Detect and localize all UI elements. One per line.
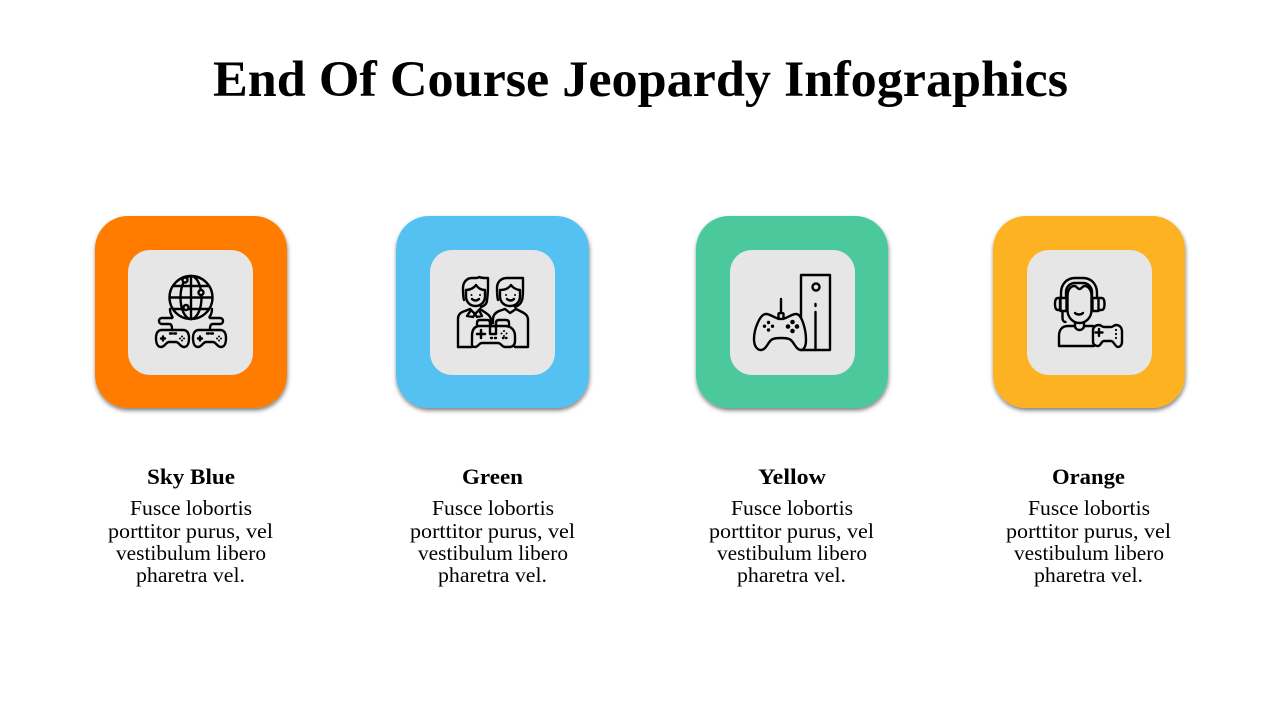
card background green bbox=[696, 216, 888, 408]
title: End Of Course Jeopardy Infographics bbox=[213, 52, 1068, 108]
body text: Fusce lobortis bbox=[432, 496, 554, 520]
body text: vestibulum libero bbox=[418, 541, 568, 565]
heading: Sky Blue bbox=[147, 464, 235, 489]
panel: yellow card bbox=[696, 216, 888, 587]
card background orange bbox=[95, 216, 287, 408]
heading: Green bbox=[462, 464, 523, 489]
body text: porttitor purus, vel bbox=[108, 519, 273, 543]
heading: Orange bbox=[1052, 464, 1125, 489]
panel: green card bbox=[396, 216, 589, 587]
body text: Fusce lobortis bbox=[1028, 496, 1150, 520]
inner tile bbox=[128, 250, 253, 375]
body text: Fusce lobortis bbox=[130, 496, 252, 520]
body text: porttitor purus, vel bbox=[709, 519, 874, 543]
icon: console tower and game controller bbox=[754, 275, 830, 350]
body text: pharetra vel. bbox=[136, 563, 245, 587]
body text: pharetra vel. bbox=[438, 563, 547, 587]
body text: pharetra vel. bbox=[737, 563, 846, 587]
body text bbox=[1006, 496, 1171, 587]
body text: vestibulum libero bbox=[1014, 541, 1164, 565]
heading: Yellow bbox=[758, 464, 827, 489]
inner tile bbox=[730, 250, 855, 375]
body text bbox=[709, 496, 874, 587]
body text: vestibulum libero bbox=[717, 541, 867, 565]
inner tile bbox=[430, 250, 555, 375]
panel: orange card bbox=[993, 216, 1185, 587]
icon: gamer with headset and controller bbox=[1055, 278, 1122, 347]
body text: pharetra vel. bbox=[1034, 563, 1143, 587]
body text bbox=[410, 496, 575, 587]
body text: porttitor purus, vel bbox=[410, 519, 575, 543]
body text bbox=[108, 496, 273, 587]
inner tile bbox=[1027, 250, 1152, 375]
body text: vestibulum libero bbox=[116, 541, 266, 565]
panel: sky blue card bbox=[95, 216, 287, 587]
card background amber bbox=[993, 216, 1185, 408]
card background blue bbox=[396, 216, 589, 408]
body text: Fusce lobortis bbox=[731, 496, 853, 520]
icon: two players with controller bbox=[458, 277, 528, 347]
body text: porttitor purus, vel bbox=[1006, 519, 1171, 543]
icon: globe with two game controllers bbox=[156, 276, 226, 347]
